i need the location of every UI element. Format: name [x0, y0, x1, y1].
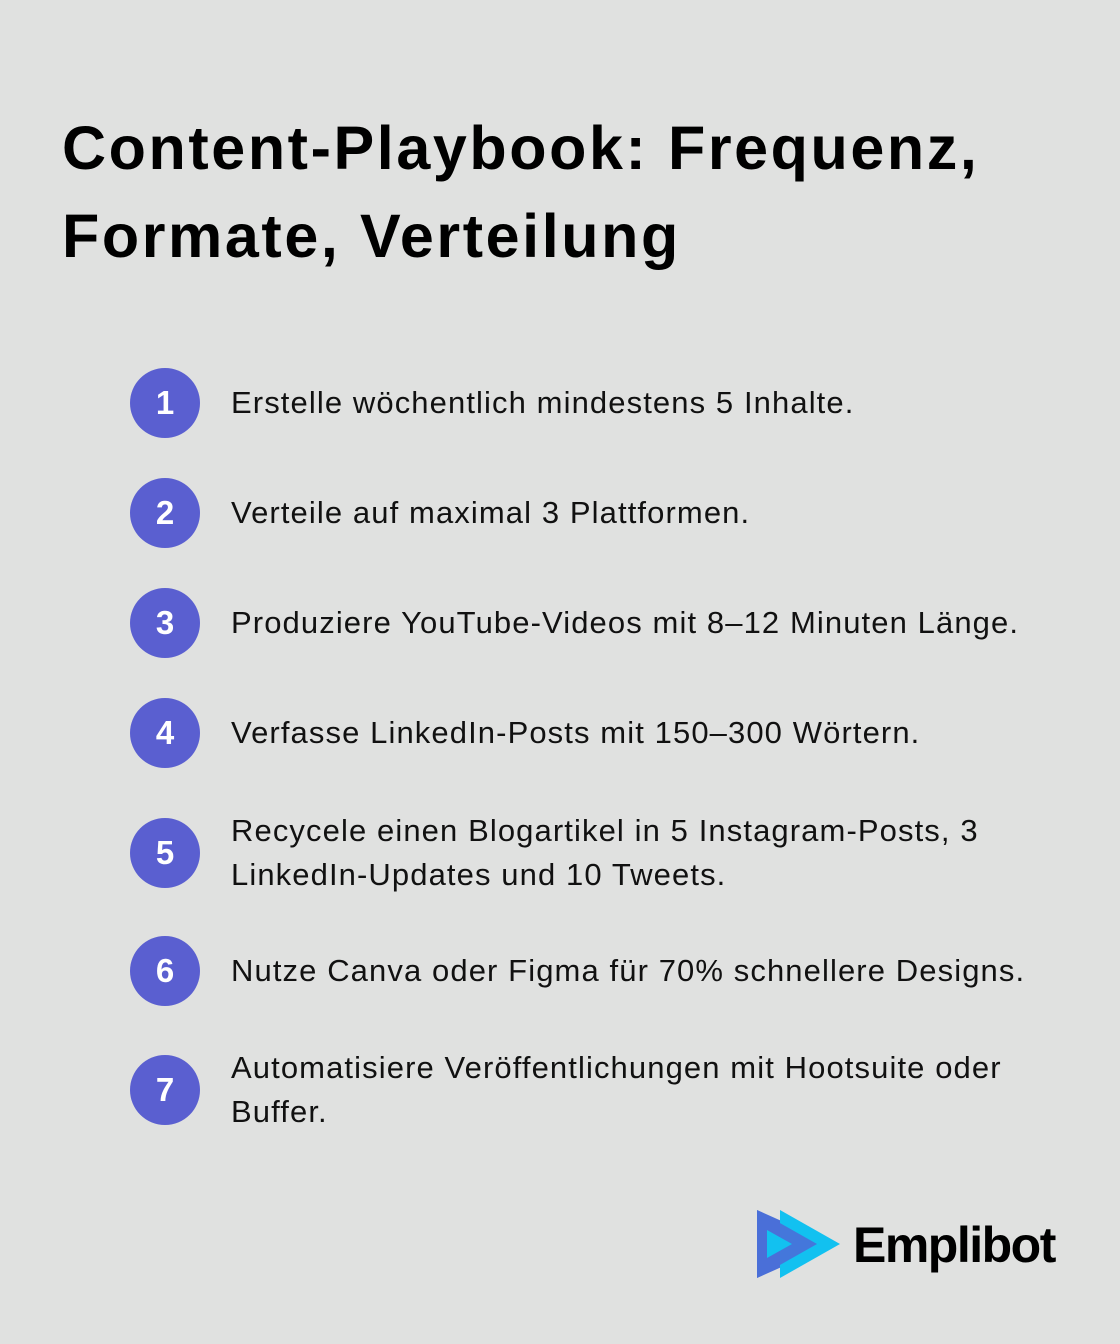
item 6: Nutze Canva oder Figma für 70% schnellere Designs. — [231, 953, 1025, 988]
item 7: 7 — [156, 1071, 174, 1108]
item 2 — [130, 478, 750, 548]
item 7: Automatisiere Veröffentlichungen mit Hootsuite oder — [231, 1050, 1002, 1085]
item 2: 2 — [156, 494, 174, 531]
logo: Emplibot — [853, 1217, 1055, 1273]
item 1: Erstelle wöchentlich mindestens 5 Inhalte. — [231, 385, 854, 420]
item 6: 6 — [156, 952, 174, 989]
item 5 — [130, 813, 979, 892]
item 2: Verteile auf maximal 3 Plattformen. — [231, 495, 750, 530]
item 3: 3 — [156, 604, 174, 641]
item 1 — [130, 368, 854, 438]
item 5: LinkedIn-Updates und 10 Tweets. — [231, 857, 726, 892]
title: Content-Playbook: Frequenz, — [62, 114, 979, 182]
item 3: Produziere YouTube-Videos mit 8–12 Minuten Länge. — [231, 605, 1019, 640]
item 7 — [130, 1050, 1002, 1129]
item 4: Verfasse LinkedIn-Posts mit 150–300 Wörtern. — [231, 715, 920, 750]
item 5: 5 — [156, 834, 174, 871]
title: Formate, Verteilung — [62, 202, 681, 270]
item 7: Buffer. — [231, 1094, 328, 1129]
item 4: 4 — [156, 714, 174, 751]
item 1: 1 — [156, 384, 174, 421]
title — [62, 114, 979, 270]
logo — [757, 1210, 1056, 1278]
item 5: Recycele einen Blogartikel in 5 Instagram-Posts, 3 — [231, 813, 979, 848]
item 3 — [130, 588, 1019, 658]
item 4 — [130, 698, 920, 768]
item 6 — [130, 936, 1025, 1006]
